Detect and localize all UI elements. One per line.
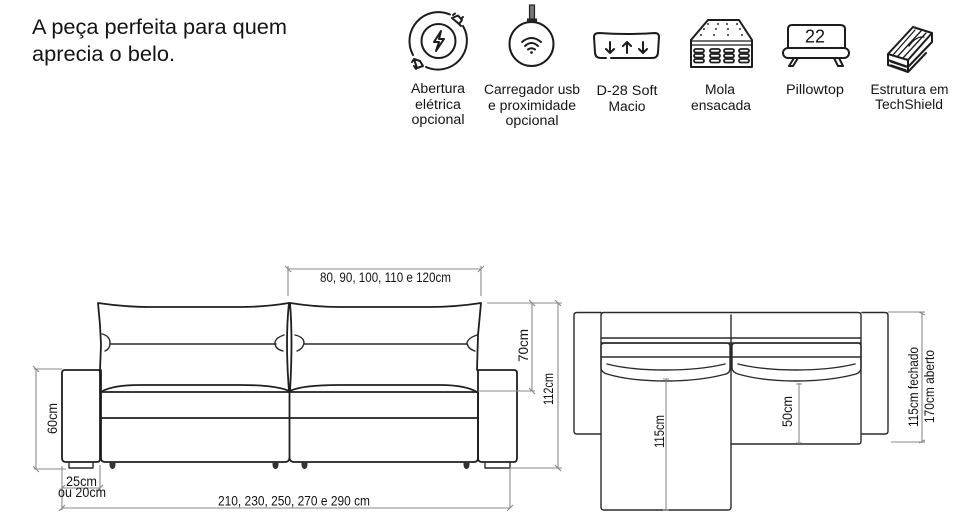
dimension: seat depth: 50cm	[780, 396, 795, 427]
dimension: back height: 70cm	[516, 329, 531, 362]
label: mola ensacada: Mola	[705, 82, 735, 97]
left back cushion	[98, 303, 289, 370]
label: carregador: opcional	[506, 113, 558, 128]
left arm	[62, 370, 100, 462]
front view sofa	[62, 303, 517, 469]
dimension: arm width	[58, 474, 106, 500]
dimension: module width: 80, 90, 100, 110 e 120cm	[320, 270, 451, 285]
title: A peça perfeita para quem	[32, 16, 287, 39]
right back cushion	[290, 303, 481, 370]
label: estrutura em techshield: TechShield	[875, 97, 943, 112]
icon: abertura elétrica	[409, 12, 467, 70]
dimension: arm width: 25cm	[66, 474, 97, 489]
label: mola ensacada: ensacada	[691, 98, 751, 113]
label: carregador: Carregador usb	[484, 82, 580, 97]
top view sofa	[574, 312, 888, 510]
label: abertura elétrica: opcional	[412, 112, 464, 127]
dimension: total height: 112cm	[541, 373, 556, 405]
feet	[69, 462, 510, 468]
dimension: depth open: 170cm aberto	[922, 350, 937, 423]
dimension: depth closed: 115cm fechado	[906, 347, 921, 427]
dimension: total width: 210, 230, 250, 270 e 290 cm	[218, 494, 370, 508]
label: pillowtop: Pillowtop	[786, 82, 844, 97]
dimension: chaise length: 115cm	[652, 415, 667, 448]
label: abertura elétrica	[411, 81, 466, 127]
icon: estrutura em techshield	[888, 27, 932, 72]
label: carregador: e proximidade	[488, 98, 576, 113]
dimension lines: front view	[33, 266, 562, 511]
backrest and chaise	[601, 312, 861, 444]
cushion seams	[110, 343, 467, 345]
right arm	[862, 312, 888, 434]
label: D-28 soft: Macio	[608, 99, 646, 114]
label: abertura elétrica: elétrica	[415, 97, 462, 112]
icon: D-28 soft	[594, 33, 659, 58]
label: D-28 soft: D-28 Soft	[596, 83, 658, 98]
right arm	[478, 370, 517, 462]
icon: mola ensacada	[691, 20, 752, 67]
icon: pillowtop	[783, 25, 849, 66]
left arm	[574, 312, 601, 434]
label: estrutura em techshield: Estrutura em	[870, 82, 948, 97]
seats	[101, 392, 477, 418]
label: abertura elétrica: Abertura	[411, 81, 466, 96]
dimension lines: top view	[663, 312, 925, 510]
icon: carregador usb	[510, 5, 554, 66]
label: estrutura em techshield	[870, 82, 948, 112]
title: aprecia o belo.	[32, 43, 175, 66]
seat cushions	[601, 343, 730, 381]
dimension: arm height: 60cm	[45, 403, 60, 434]
label: mola ensacada	[691, 82, 751, 113]
dimension: arm width: ou 20cm	[58, 485, 106, 500]
label: carregador	[484, 82, 580, 128]
icon: pillowtop: 22	[805, 26, 825, 46]
label: D-28 soft	[596, 83, 658, 114]
title	[32, 16, 287, 66]
